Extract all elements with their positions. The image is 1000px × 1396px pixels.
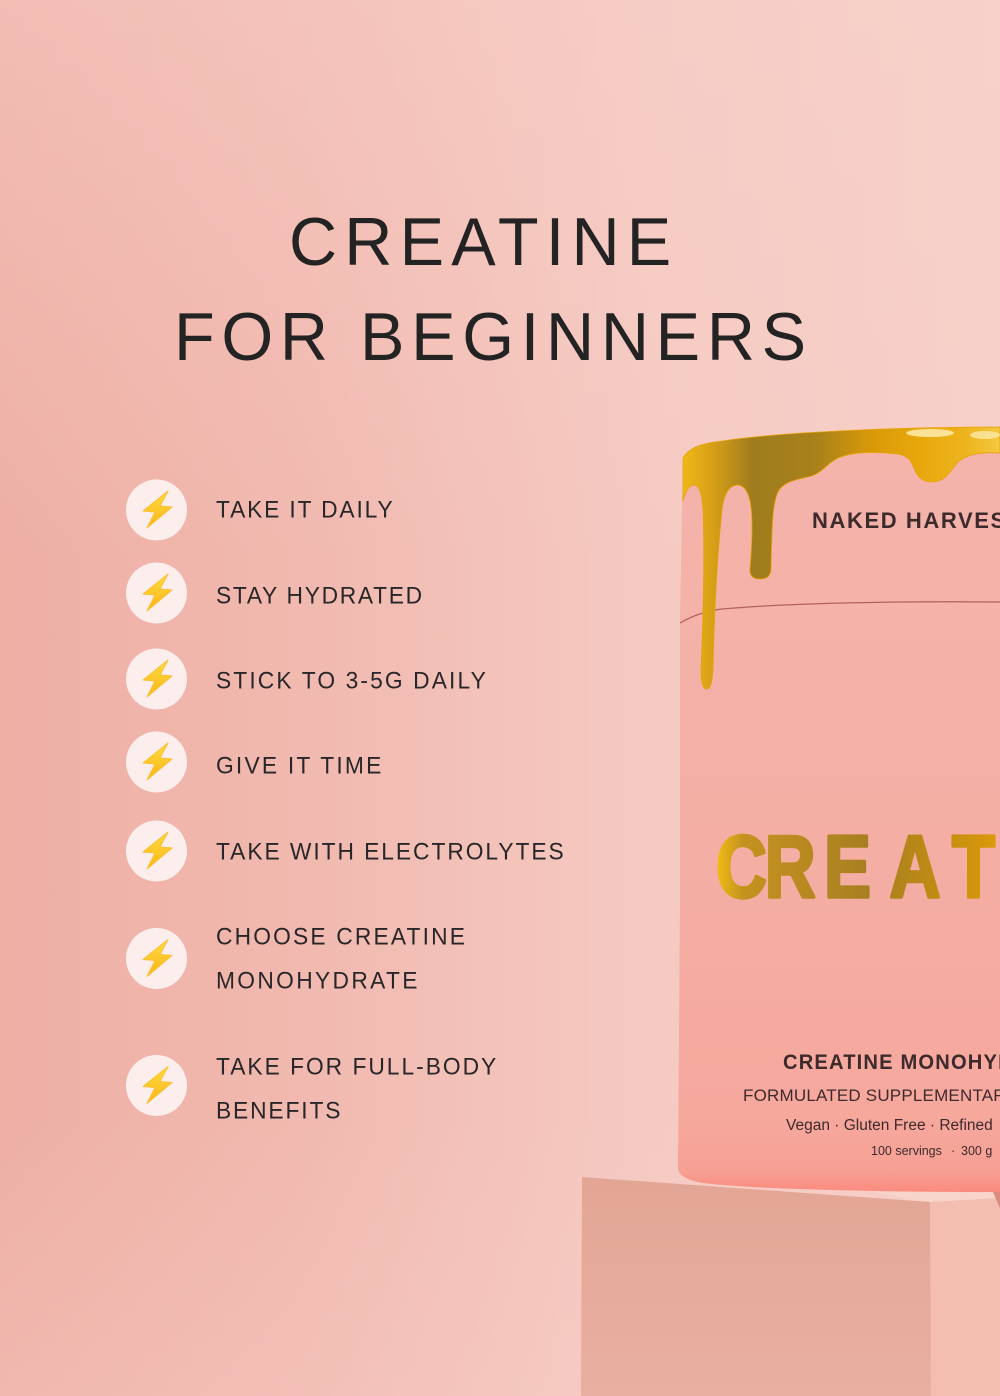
- item: choose creatine monohydrate: [126, 923, 465, 994]
- item: take it daily: TAKE IT DAILY: [216, 496, 393, 523]
- claims line: Vegan · Gluten Free · Refined: [786, 1117, 993, 1134]
- item: give it time: GIVE IT TIME: [216, 752, 381, 779]
- lid seam: [680, 602, 1000, 623]
- servings line: 100 servings: [871, 1144, 942, 1158]
- item: take for full-body benefits: [126, 1053, 497, 1124]
- item: choose creatine monohydrate: MONOHYDRATE: [216, 967, 417, 994]
- item: give it time: [126, 732, 381, 792]
- pedestal block: [581, 1177, 1000, 1396]
- item: choose creatine monohydrate: CHOOSE CREATINE: [216, 923, 465, 950]
- title: [174, 204, 806, 375]
- item: stick to 3-5g daily: [126, 648, 486, 710]
- item: stay hydrated: [126, 562, 422, 624]
- item: take for full-body benefits: BENEFITS: [216, 1097, 340, 1124]
- item: take with electrolytes: [126, 820, 564, 882]
- gold drip: [683, 427, 1000, 689]
- title: FOR BEGINNERS: [174, 299, 806, 375]
- item: take it daily: [126, 480, 393, 540]
- panel: checklist: [126, 480, 564, 1124]
- item: take for full-body benefits: TAKE FOR FULL-BODY: [216, 1053, 497, 1080]
- gold highlights: [906, 429, 1000, 439]
- item: stick to 3-5g daily: STICK TO 3-5G DAILY: [216, 667, 486, 694]
- title: CREATINE: [289, 204, 671, 280]
- servings line: 300 g: [961, 1144, 992, 1158]
- jar body: [678, 427, 1000, 1192]
- servings line: ·: [951, 1144, 955, 1158]
- item: stay hydrated: STAY HYDRATED: [216, 582, 422, 609]
- product jar: [678, 427, 1000, 1192]
- item: take with electrolytes: TAKE WITH ELECTROLYTES: [216, 838, 564, 865]
